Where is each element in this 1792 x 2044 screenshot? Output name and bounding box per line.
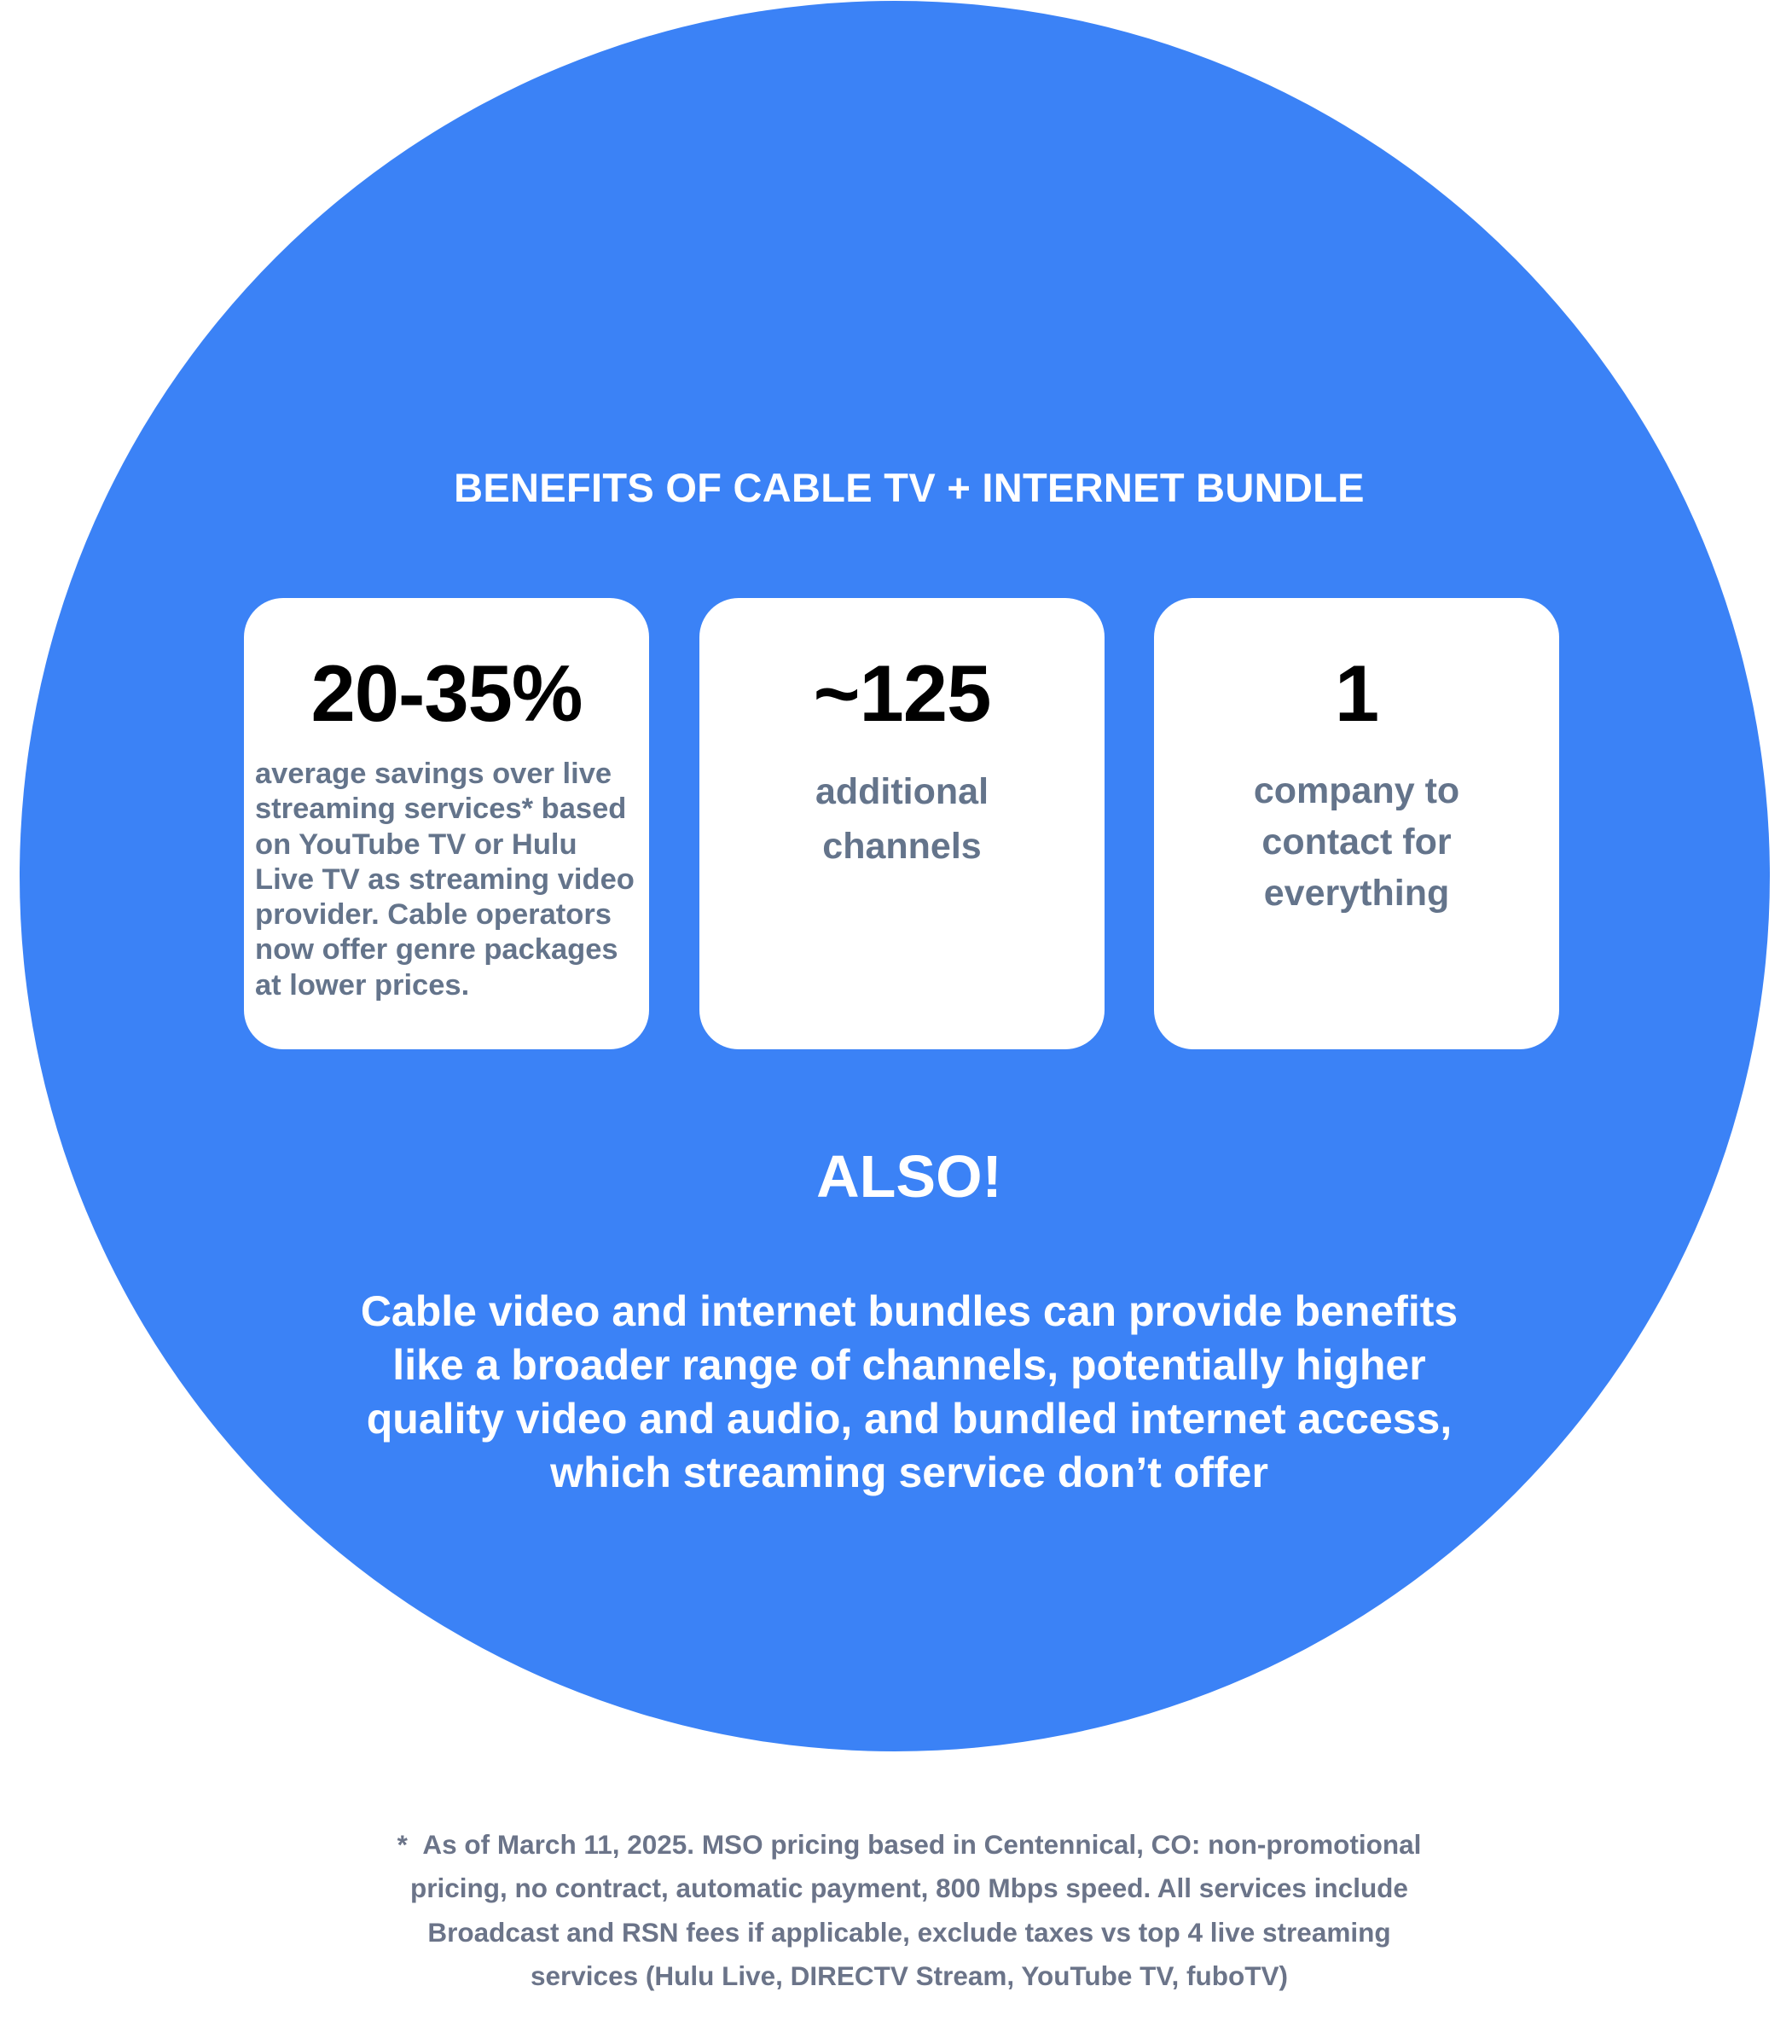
card text: additional channels: channels: [822, 826, 982, 867]
card text: savings description: at lower prices.: [255, 969, 469, 1002]
card: one company: [1154, 598, 1559, 1049]
card text: additional channels: additional: [815, 771, 989, 812]
card text: company to contact: company to: [1254, 770, 1459, 811]
footnote: pricing, no contract, automatic payment, 800 Mbps speed. All services include: [410, 1873, 1408, 1903]
footnote: [397, 1829, 1421, 1991]
card text: savings description: Live TV as streaming video: [255, 863, 635, 896]
footnote: Broadcast and RSN fees if applicable, exclude taxes vs top 4 live streaming: [427, 1917, 1391, 1948]
card text: savings description: streaming services* based: [255, 793, 626, 825]
stat: ~125: ~125: [814, 648, 990, 738]
stat: 20-35%: 20-35%: [310, 648, 582, 738]
card text: savings description: on YouTube TV or Hulu: [255, 828, 577, 861]
card text: company to contact: everything: [1264, 873, 1449, 914]
card text: savings description: now offer genre packages: [255, 933, 618, 966]
paragraph: bundle benefits: which streaming service don’t offer: [550, 1449, 1268, 1496]
card: channels: [699, 598, 1105, 1049]
paragraph: bundle benefits: Cable video and internet bundles can provide benefits: [361, 1287, 1458, 1335]
card text: savings description: [255, 758, 635, 1002]
footnote: * As of March 11, 2025. MSO pricing based in Centennical, CO: non-promotional: [397, 1829, 1421, 1860]
card text: savings description: provider. Cable operators: [255, 898, 612, 931]
paragraph: bundle benefits: [361, 1287, 1458, 1496]
stat: 1: 1: [1335, 648, 1378, 738]
paragraph: bundle benefits: like a broader range of channels, potentially higher: [392, 1341, 1426, 1389]
card text: company to contact: [1254, 770, 1459, 914]
card text: company to contact: contact for: [1261, 822, 1452, 862]
card text: additional channels: [815, 771, 989, 867]
heading: ALSO!: ALSO!: [816, 1143, 1002, 1210]
card text: savings description: average savings over live: [255, 758, 612, 790]
paragraph: bundle benefits: quality video and audio, and bundled internet access,: [367, 1395, 1452, 1443]
footnote: services (Hulu Live, DIRECTV Stream, YouTube TV, fuboTV): [531, 1960, 1288, 1991]
title: BENEFITS OF CABLE TV + INTERNET BUNDLE: [454, 465, 1365, 510]
card: savings: [244, 598, 649, 1049]
